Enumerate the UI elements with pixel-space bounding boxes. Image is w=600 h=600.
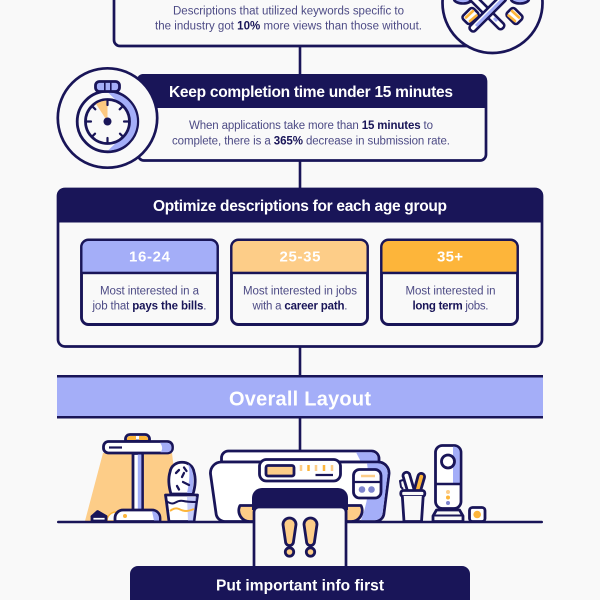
icon: desk lamp <box>85 434 180 522</box>
icon: paper with exclamation marks <box>252 488 348 570</box>
connector line <box>299 40 301 490</box>
banner: overall layout: Overall Layout <box>229 388 371 410</box>
panel: age groups <box>57 188 543 346</box>
icon: printer <box>210 451 389 522</box>
panel: keywords description <box>114 0 484 46</box>
icon: pencil cup <box>400 472 425 522</box>
card: 35+ <box>382 240 518 324</box>
text block: complete, there is a 365% decrease in submission rate. <box>172 136 450 148</box>
card: 25-35: 25-35 <box>280 248 320 266</box>
card: 16-24: job that pays the bills. <box>92 300 206 312</box>
card: 35+: Most interested in <box>406 286 496 298</box>
panel: keywords description: the industry got 10% more views than those without. <box>155 20 422 32</box>
panel: keywords description: Descriptions that utilized keywords specific to <box>173 6 404 18</box>
icon: crossed tools <box>442 0 542 53</box>
icon: stopwatch <box>58 68 157 168</box>
card: 16-24 <box>82 240 218 324</box>
card: 35+: long term jobs. <box>412 300 488 312</box>
icon: cactus <box>166 462 198 522</box>
icon: speaker <box>433 446 463 522</box>
heading: Keep completion time under 15 minutes <box>169 84 453 101</box>
panel: put important info first <box>130 566 470 600</box>
panel: completion time <box>137 74 487 160</box>
panel: put important info first: Put important info first <box>216 578 384 594</box>
card: 25-35: Most interested in jobs <box>243 286 357 298</box>
card: 25-35: with a career path. <box>252 300 348 312</box>
card: 16-24: 16-24 <box>129 248 171 266</box>
banner: overall layout <box>57 375 543 418</box>
card: 16-24: Most interested in a <box>100 286 200 298</box>
text block <box>172 120 450 148</box>
text block: When applications take more than 15 minutes to <box>189 120 433 132</box>
heading: Optimize descriptions for each age group <box>153 198 447 215</box>
card: 35+: 35+ <box>437 248 463 266</box>
shelf line <box>57 521 543 523</box>
icon: small square device <box>470 508 485 522</box>
card: 25-35 <box>232 240 368 324</box>
